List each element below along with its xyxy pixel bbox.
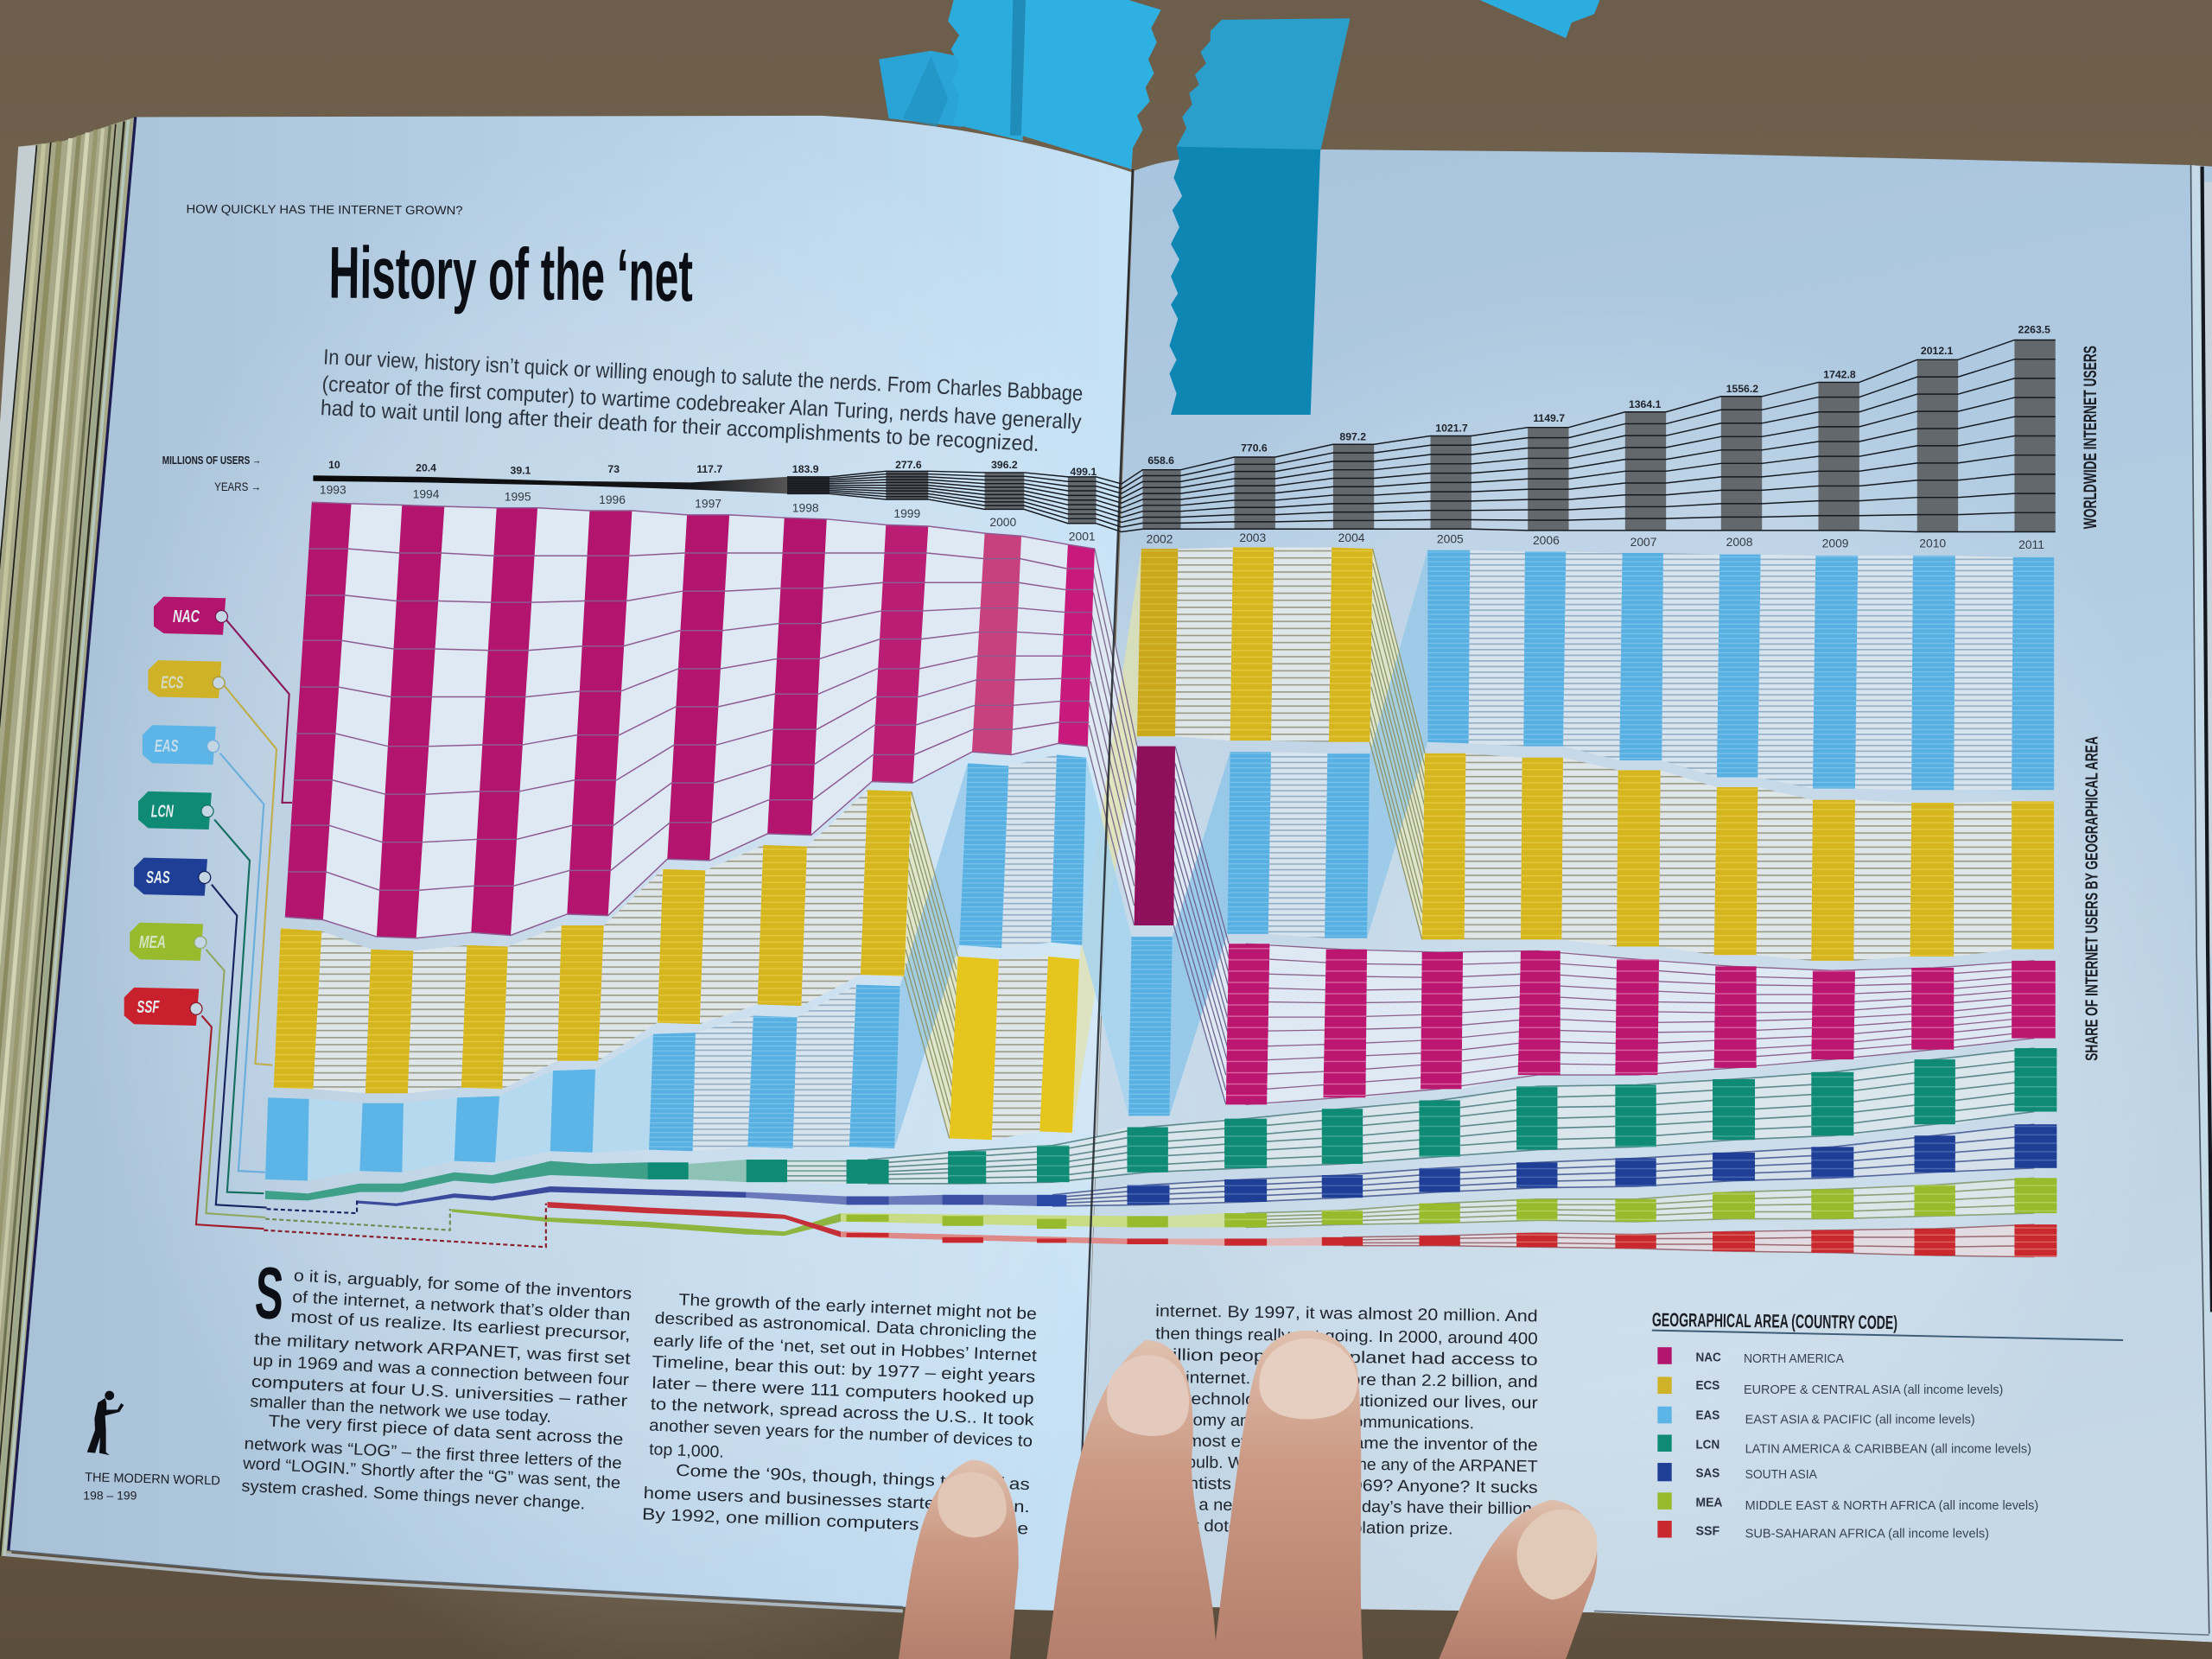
bookmark tabs behind the book	[879, 0, 1599, 169]
legend row: SAS: SOUTH ASIA	[1745, 1468, 1817, 1482]
legend row: MEA	[1657, 1492, 2038, 1513]
chart: share of users by region	[265, 502, 2056, 1257]
body text column 1: most of us realize. Its earliest precursor,	[290, 1308, 631, 1344]
bookmark tape over right page	[1169, 18, 1350, 415]
year labels: 2002	[1147, 532, 1173, 546]
finger 4	[1439, 1500, 1597, 1659]
legend row: SAS: SAS	[1695, 1466, 1719, 1480]
user values: 499.1	[1071, 466, 1096, 478]
year labels: 2008	[1726, 535, 1753, 549]
footer: section name and page numbers	[83, 1471, 220, 1503]
body text column 3: dollar dotcoms as a consolation prize.	[1155, 1516, 1453, 1539]
MEA row lines	[1246, 1178, 2034, 1227]
user values: 20.4	[416, 461, 436, 474]
body text column 1: network was “LOG” – the first three letters of the	[244, 1435, 622, 1473]
LCN connectors	[689, 1048, 2014, 1184]
user values: 39.1	[511, 465, 531, 477]
NAC connectors	[323, 504, 2012, 1104]
body text column 3: to be a nerd, but at least today’s have their billion-	[1155, 1496, 1538, 1518]
body text column 2: described as astronomical. Data chronicling the	[654, 1309, 1037, 1344]
user values: 770.6	[1241, 442, 1268, 454]
vertical chart labels	[2081, 346, 2102, 1061]
tag: SSF: SSF	[137, 998, 160, 1017]
section header: HOW QUICKLY HAS THE INTERNET GROWN?	[186, 202, 463, 217]
year labels: 2009	[1822, 536, 1849, 550]
year labels: 1999	[893, 506, 920, 520]
title: History of the ‘net	[328, 231, 693, 316]
legend row: EAS	[1657, 1407, 1975, 1427]
legend row: MEA: MIDDLE EAST & NORTH AFRICA (all income levels)	[1745, 1499, 2038, 1513]
tag: MEA	[130, 923, 207, 961]
legend row: SSF	[1657, 1521, 1989, 1541]
tag: LCN: LCN	[151, 802, 175, 821]
legend row: NAC	[1657, 1347, 1844, 1366]
intro paragraph	[320, 346, 1084, 456]
body text column 1: o it is, arguably, for some of the inventors	[293, 1267, 632, 1304]
body text column 2: home users and businesses started to log on.	[643, 1484, 1030, 1516]
page stack at left edge	[0, 118, 136, 1556]
tag: NAC: NAC	[173, 607, 200, 626]
EAS bars	[265, 550, 2054, 1181]
year labels: 2001	[1069, 529, 1096, 543]
body text column 3: Almost everyone can name the inventor of the	[1171, 1432, 1538, 1455]
MEA bars	[847, 1178, 2056, 1229]
body text column 2: By 1992, one million computers were on the	[642, 1505, 1028, 1539]
body text column 3: economy and our global communications.	[1155, 1411, 1474, 1433]
gutter line	[1077, 169, 1133, 1605]
MEA connectors	[1168, 1178, 2014, 1227]
SAS connectors	[1066, 1124, 2014, 1206]
year labels: 1998	[792, 501, 819, 515]
body text column 2: to the network, spread across the U.S.. It took	[650, 1395, 1035, 1430]
intro paragraph: (creator of the first computer) to wartime codebreaker Alan Turing, nerds have generally	[321, 372, 1083, 435]
body text column 2: The growth of the early internet might not be	[678, 1291, 1037, 1324]
body text column 2: another seven years for the number of devices to	[649, 1417, 1033, 1451]
intro paragraph: had to wait until long after their death for their accomplishments to be recognized.	[320, 397, 1039, 456]
leader lines	[196, 620, 546, 1247]
body text column 3: scientists from back in 1969? Anyone? It sucks	[1155, 1474, 1538, 1497]
LCN bars	[647, 1048, 2056, 1184]
axis labels: YEARS →	[214, 480, 261, 493]
right page	[1079, 149, 2212, 1642]
user values: 1742.8	[1823, 369, 1856, 381]
user values: 277.6	[895, 459, 922, 471]
legend row: LCN: LCN	[1695, 1439, 1719, 1452]
body text column 1: of the internet, a network that’s older than	[292, 1288, 631, 1325]
tag: EAS: EAS	[155, 737, 179, 756]
footer: section name and page numbers: 198 – 199	[83, 1489, 137, 1503]
year labels: 1996	[599, 493, 626, 506]
user values: 1149.7	[1533, 412, 1565, 424]
legend row: NAC: NORTH AMERICA	[1744, 1352, 1844, 1366]
body text column 1: word “LOGIN.” Shortly after the “G” was sent, the	[242, 1455, 621, 1492]
body text column 2: early life of the ‘net, set out in Hobbes’ Internet	[653, 1332, 1038, 1365]
finger 2	[1046, 1340, 1216, 1659]
tag: SAS	[134, 858, 211, 896]
body text column 1: smaller than the network we use today.	[250, 1393, 552, 1427]
user values: 1556.2	[1726, 383, 1758, 395]
user values: 10	[328, 459, 340, 471]
year labels: 2000	[989, 515, 1017, 529]
year labels: 2006	[1533, 533, 1560, 547]
EAS connectors	[308, 550, 2013, 1181]
body text column 1: computers at four U.S. universities – rather	[251, 1373, 629, 1411]
body text column 2: top 1,000.	[649, 1440, 724, 1462]
tag: MEA: MEA	[139, 933, 166, 952]
tag: SSF	[124, 988, 202, 1026]
year labels	[320, 482, 2044, 551]
drop cap: S	[253, 1251, 286, 1335]
tag: ECS: ECS	[161, 674, 183, 693]
body text column 1: up in 1969 and was a connection between four	[252, 1351, 630, 1389]
intro paragraph: In our view, history isn’t quick or willing enough to salute the nerds. From Charles Babbage	[323, 346, 1084, 406]
body text column 3	[1155, 1302, 1538, 1539]
year labels: 2004	[1338, 531, 1365, 544]
crossing connectors	[894, 549, 1427, 1148]
vertical chart labels: WORLDWIDE INTERNET USERS	[2081, 346, 2101, 529]
axis labels: MILLIONS OF USERS →	[162, 454, 261, 467]
crossing row lines	[905, 549, 1425, 1139]
body text column 1: system crashed. Some things never change.	[241, 1478, 586, 1514]
region tags with leader lines	[124, 597, 546, 1247]
body text column 3: the technology has revolutionized our lives, our	[1155, 1389, 1538, 1413]
user values: 1021.7	[1435, 423, 1468, 435]
user values: 2263.5	[2018, 323, 2050, 335]
legend row: LCN	[1657, 1434, 2031, 1457]
legend row: SAS	[1657, 1463, 1817, 1482]
user values: 73	[607, 463, 620, 475]
tag: NAC	[154, 597, 227, 635]
legend row: ECS: ECS	[1695, 1379, 1719, 1393]
legend row: LCN: LATIN AMERICA & CARIBBEAN (all income levels)	[1745, 1443, 2031, 1457]
SSF bars	[847, 1224, 2056, 1257]
year labels: 2005	[1437, 532, 1464, 546]
user values: 658.6	[1147, 454, 1174, 467]
tag: ECS	[148, 660, 225, 698]
ECS connectors	[313, 547, 2012, 1140]
user values: 2012.1	[1921, 345, 1954, 357]
LCN row lines	[868, 1048, 2034, 1184]
year labels: 1994	[413, 486, 440, 500]
user values: 183.9	[792, 463, 819, 475]
body text column 2: later – there were 111 computers hooked up	[652, 1375, 1034, 1408]
body text column 1: The very first piece of data sent across the	[268, 1413, 624, 1449]
SAS bars	[847, 1124, 2056, 1206]
body text column 3: million people on the planet had access to	[1155, 1346, 1538, 1370]
early ribbons	[265, 1161, 1128, 1244]
year labels: 1997	[695, 497, 721, 511]
icon: figure reading a tablet	[87, 1391, 124, 1455]
body text column 3: internet. By 1997, it was almost 20 million. And	[1155, 1302, 1538, 1325]
footer: section name and page numbers: THE MODERN WORLD	[85, 1471, 220, 1488]
SSF connectors	[1168, 1224, 2014, 1257]
legend row: EAS: EAS	[1695, 1408, 1719, 1422]
vertical chart labels: SHARE OF INTERNET USERS BY GEOGRAPHICAL AREA	[2083, 736, 2102, 1061]
tag: LCN	[138, 791, 213, 830]
year labels: 2011	[2018, 537, 2044, 551]
year labels: 2003	[1239, 531, 1266, 544]
finger 1	[899, 1460, 1019, 1659]
SSF row lines	[1343, 1224, 2034, 1257]
wedge: early users	[313, 475, 787, 493]
legend row: ECS	[1657, 1376, 2003, 1397]
NAC bars	[285, 502, 2056, 1104]
left page NAC row lines	[285, 502, 1095, 938]
user values	[328, 323, 2050, 478]
body text column 2	[642, 1291, 1038, 1539]
user level lines	[787, 340, 2056, 532]
legend row: ECS: EUROPE & CENTRAL ASIA (all income levels)	[1744, 1383, 2003, 1397]
tag: SAS: SAS	[146, 868, 170, 887]
right page NAC row lines	[1246, 944, 2034, 1104]
body text column 3: then things really got going. In 2000, around 400	[1155, 1325, 1538, 1349]
legend row: SSF: SSF	[1695, 1524, 1719, 1538]
body text column 3: the internet. Today it’s more than 2.2 billion, and	[1155, 1369, 1538, 1391]
SAS row lines	[1052, 1124, 2034, 1206]
body text column 2: Come the ‘90s, though, things took off as	[676, 1462, 1030, 1494]
year labels: 1995	[505, 490, 531, 504]
user values: 396.2	[991, 459, 1018, 471]
year labels: 2010	[1919, 536, 1946, 550]
fingers holding the book	[899, 1331, 1597, 1659]
body text column 1: the military network ARPANET, was first set	[254, 1331, 632, 1369]
legend heading: GEOGRAPHICAL AREA (COUNTRY CODE)	[1652, 1309, 1897, 1333]
tag: EAS	[143, 725, 219, 765]
body text column 1	[241, 1267, 632, 1514]
legend	[1652, 1309, 2123, 1541]
left page	[7, 116, 1131, 1611]
legend row: SSF: SUB-SAHARAN AFRICA (all income levels)	[1745, 1528, 1989, 1541]
axis labels	[162, 454, 261, 493]
user values: 1364.1	[1629, 398, 1662, 410]
finger 3	[1213, 1331, 1363, 1659]
year labels: 2007	[1630, 535, 1657, 549]
year labels: 1993	[320, 482, 346, 496]
legend row: NAC: NAC	[1695, 1351, 1721, 1365]
user bars	[787, 340, 2056, 532]
chart: worldwide internet users	[313, 323, 2056, 551]
body text column 2: Timeline, bear this out: by 1977 – eight years	[652, 1353, 1036, 1387]
ECS bars	[274, 547, 2054, 1140]
user values: 897.2	[1339, 430, 1366, 442]
body text column 3: lightbulb. Well, can you name any of the ARPANET	[1155, 1453, 1538, 1476]
legend row: EAS: EAST ASIA & PACIFIC (all income levels)	[1745, 1413, 1975, 1427]
user values: 117.7	[696, 463, 722, 475]
legend row: MEA: MEA	[1695, 1497, 1723, 1510]
